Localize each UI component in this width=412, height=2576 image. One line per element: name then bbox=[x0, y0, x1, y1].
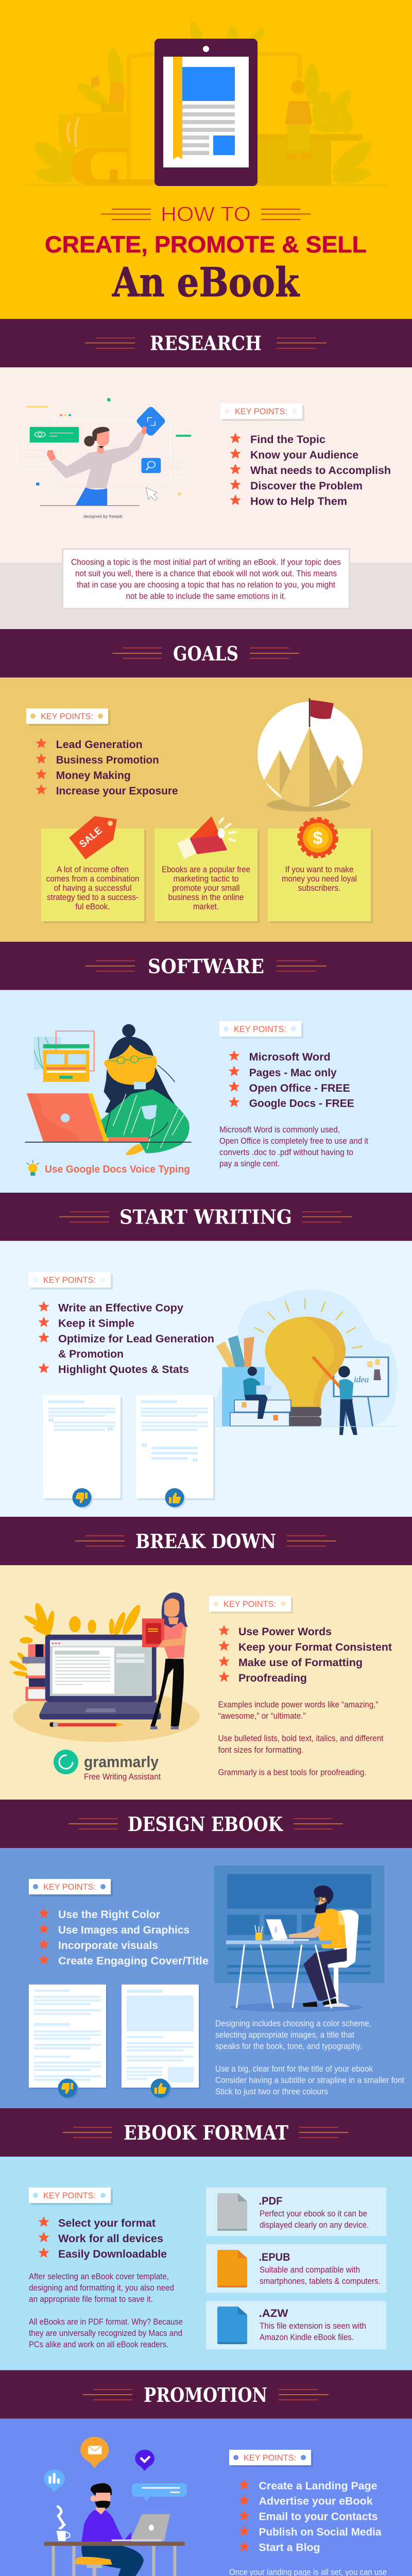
heading: goals bbox=[0, 629, 412, 677]
key points list: Discover the Problem bbox=[250, 480, 363, 492]
card: marketing: Ebooks are a popular free bbox=[162, 865, 250, 874]
key points badge bbox=[29, 1879, 113, 1896]
card: subscribers: subscribers. bbox=[298, 883, 341, 893]
logo: grammarly bbox=[54, 1750, 161, 1782]
icon: orange file bbox=[217, 2250, 247, 2287]
key points list: Start a Blog bbox=[259, 2541, 320, 2553]
illustration: man working at desk bbox=[214, 1866, 384, 2012]
key points list: Use the Right Color bbox=[58, 1909, 160, 1921]
icon: megaphone bbox=[177, 816, 235, 859]
card: good page bbox=[136, 1395, 215, 1509]
paragraph: font sizes for formatting. bbox=[218, 1745, 304, 1755]
key points list: Keep it Simple bbox=[58, 1317, 134, 1329]
key points list: Create a Landing Page bbox=[259, 2480, 377, 2492]
panel: design ebook bbox=[0, 1848, 412, 2108]
key points badge bbox=[209, 1596, 293, 1614]
key points badge: KEY POINTS: bbox=[43, 1276, 96, 1285]
heading: ebook format bbox=[0, 2108, 412, 2157]
heading: start writing: START WRITING bbox=[119, 1206, 292, 1228]
paragraph: Examples include power words like “amazing,” bbox=[218, 1700, 379, 1709]
panel: start writing bbox=[0, 1241, 412, 1517]
format card: PDF: displayed clearly on any device. bbox=[260, 2220, 369, 2230]
heading: software bbox=[0, 942, 412, 990]
key points list: Incorporate visuals bbox=[58, 1940, 158, 1952]
format card: PDF: .PDF bbox=[259, 2195, 283, 2207]
illustration: woman with laptop and book bbox=[8, 1592, 200, 1742]
key points list: Highlight Quotes & Stats bbox=[58, 1364, 189, 1376]
key points list bbox=[219, 1625, 392, 1684]
paragraph bbox=[219, 1125, 368, 1168]
icon: dollar badge: $ bbox=[313, 828, 323, 848]
paragraph: Grammarly is a best tools for proofreading. bbox=[218, 1767, 367, 1777]
key points list: Work for all devices bbox=[58, 2233, 163, 2245]
key points list: Advertise your eBook bbox=[259, 2496, 373, 2507]
paragraph: designing and formatting it, you also need bbox=[29, 2283, 174, 2293]
key points list bbox=[39, 2217, 167, 2260]
icon: thumbs up bbox=[150, 2078, 171, 2099]
format card: AZW: .AZW bbox=[259, 2308, 288, 2319]
format card: AZW bbox=[206, 2301, 386, 2349]
key points list: Easily Downloadable bbox=[58, 2248, 167, 2260]
card: income: A lot of income often bbox=[57, 865, 129, 874]
card: good layout bbox=[122, 1985, 200, 2099]
heading: break down: BREAK DOWN bbox=[135, 1530, 276, 1553]
key points badge: KEY POINTS: bbox=[43, 2191, 96, 2200]
paragraph: “awesome,” or “ultimate.” bbox=[218, 1711, 306, 1721]
key points list: Increase your Exposure bbox=[56, 785, 178, 797]
key points list: Business Promotion bbox=[56, 754, 159, 766]
key points list: Lead Generation bbox=[56, 739, 143, 751]
card: subscribers bbox=[268, 819, 373, 923]
title: An eBook bbox=[112, 259, 300, 306]
key points list: Proofreading bbox=[238, 1672, 307, 1684]
format card: EPUB: smartphones, tablets & computers. bbox=[260, 2276, 381, 2286]
illustration: woman at laptop bbox=[25, 1024, 191, 1155]
card: subscribers: money you need loyal bbox=[282, 874, 357, 884]
key points badge: KEY POINTS: bbox=[41, 712, 93, 721]
heading: goals: GOALS bbox=[173, 642, 238, 665]
key points list: Find the Topic bbox=[250, 434, 325, 446]
logo: grammarly: grammarly bbox=[84, 1753, 159, 1771]
key points list bbox=[39, 1908, 209, 1967]
key points badge bbox=[219, 1021, 303, 1039]
panel: hero bbox=[0, 0, 412, 319]
heading: design ebook: DESIGN EBOOK bbox=[128, 1812, 284, 1836]
panel: ebook format bbox=[0, 2157, 412, 2370]
key points list bbox=[36, 738, 178, 797]
icon: sale tag bbox=[69, 816, 117, 859]
key points list: What needs to Accomplish bbox=[250, 465, 391, 477]
key points badge bbox=[220, 403, 304, 421]
card: bad layout bbox=[29, 1985, 108, 2099]
credit: freepik: designed by freepik bbox=[83, 514, 123, 519]
heading: software: SOFTWARE bbox=[148, 955, 264, 978]
paragraph: Microsoft Word is commonly used, bbox=[219, 1125, 340, 1134]
key points list: Make use of Formatting bbox=[238, 1657, 363, 1669]
format card: PDF: Perfect your ebook so it can be bbox=[260, 2209, 367, 2218]
key points list: Use Power Words bbox=[238, 1626, 332, 1638]
heading: start writing bbox=[0, 1193, 412, 1241]
key points badge: KEY POINTS: bbox=[244, 2453, 296, 2463]
illustration: man at computer with chat bubbles bbox=[27, 2437, 196, 2576]
text box bbox=[63, 549, 349, 609]
paragraph: PCs alike and work on all eBook readers. bbox=[29, 2340, 168, 2349]
key points list: Select your format bbox=[58, 2217, 156, 2229]
logo: grammarly: Free Writing Assistant bbox=[84, 1772, 161, 1782]
icon: dollar badge bbox=[299, 819, 336, 856]
card: marketing: market. bbox=[193, 902, 219, 911]
key points badge: KEY POINTS: bbox=[234, 1025, 286, 1034]
format card: EPUB: .EPUB bbox=[259, 2251, 290, 2263]
paragraph bbox=[215, 2019, 404, 2096]
card: subscribers: If you want to make bbox=[285, 865, 353, 874]
paragraph: Use bulleted lists, bold text, italics, and different bbox=[218, 1733, 384, 1743]
card: marketing: marketing tactic to bbox=[173, 874, 239, 884]
icon: grey file bbox=[217, 2193, 247, 2231]
card: good page: ” bbox=[192, 1456, 198, 1470]
paragraph: converts .doc to .pdf without having to bbox=[219, 1147, 353, 1157]
key points list bbox=[39, 1301, 214, 1376]
key points badge bbox=[29, 1272, 113, 1290]
board label: idea bbox=[354, 1375, 369, 1384]
card: income: of having a successful bbox=[54, 883, 132, 893]
paragraph: After selecting an eBook cover template, bbox=[29, 2272, 169, 2281]
tip text: Use Google Docs Voice Typing bbox=[45, 1164, 190, 1175]
text box: that in case you are choosing a topic that has no relation to you, you might bbox=[77, 580, 335, 589]
format card: AZW: This file extension is seen with bbox=[260, 2321, 366, 2331]
panel: break down bbox=[0, 1565, 412, 1800]
paragraph: Designing includes choosing a color scheme, bbox=[215, 2019, 371, 2028]
key points badge bbox=[229, 2450, 313, 2467]
card: marketing bbox=[154, 816, 260, 923]
key points list: Know your Audience bbox=[250, 449, 358, 461]
card: bad page: “ bbox=[48, 1416, 54, 1429]
icon: sale tag: SALE bbox=[77, 825, 105, 850]
panel: software bbox=[0, 990, 412, 1193]
key points list: Keep your Format Consistent bbox=[238, 1641, 392, 1653]
paragraph: Open Office is completely free to use and it bbox=[219, 1136, 368, 1146]
key points list: Microsoft Word bbox=[249, 1051, 331, 1063]
key points list: Use Images and Graphics bbox=[58, 1924, 190, 1936]
paragraph: they are universally recognized by Macs and bbox=[29, 2328, 182, 2338]
panel: research bbox=[0, 367, 412, 629]
key points list: Publish on Social Media bbox=[259, 2526, 382, 2538]
heading: promotion: PROMOTION bbox=[144, 2383, 267, 2406]
illustration: light bulb with people bbox=[213, 1290, 398, 1435]
tablet illustration bbox=[154, 39, 258, 186]
heading: research: RESEARCH bbox=[150, 332, 262, 354]
icon: light bulb tip bbox=[27, 1160, 39, 1176]
card: marketing: business in the online bbox=[168, 892, 244, 902]
card: good page: “ bbox=[141, 1441, 147, 1454]
key points list: Pages - Mac only bbox=[249, 1067, 337, 1079]
text box: not be able to include the same emotions in it. bbox=[126, 591, 286, 601]
panel: goals bbox=[0, 677, 412, 942]
key points list: Optimize for Lead Generation bbox=[58, 1333, 214, 1345]
card: income: comes from a combination bbox=[46, 874, 139, 884]
key points list: How to Help Them bbox=[250, 496, 347, 507]
title: CREATE, PROMOTE & SELL bbox=[45, 231, 367, 258]
card: bad page: ” bbox=[107, 1426, 113, 1439]
icon: thumbs down bbox=[58, 2078, 78, 2099]
key points badge: KEY POINTS: bbox=[235, 407, 287, 416]
key points list: Google Docs - FREE bbox=[249, 1098, 354, 1110]
icon: thumbs down bbox=[72, 1488, 93, 1509]
paragraph: pay a single cent. bbox=[219, 1159, 280, 1168]
key points list: & Promotion bbox=[58, 1348, 124, 1360]
paragraph bbox=[218, 1700, 384, 1777]
heading: ebook format: EBOOK FORMAT bbox=[124, 2121, 288, 2144]
key points list bbox=[229, 1051, 354, 1110]
heading: design ebook bbox=[0, 1800, 412, 1848]
paragraph: Use a big, clear font for the title of your ebook bbox=[215, 2064, 373, 2074]
key points list: Money Making bbox=[56, 770, 131, 782]
paragraph: selecting appropriate images, a title that bbox=[215, 2030, 354, 2040]
key points badge bbox=[29, 2188, 113, 2205]
format card: EPUB: Suitable and compatible with bbox=[260, 2265, 360, 2275]
text box: Choosing a topic is the most initial part of writing an eBook. If your topic does bbox=[71, 557, 341, 567]
format card: AZW: Amazon Kindle eBook files. bbox=[260, 2332, 354, 2342]
key points badge bbox=[26, 708, 110, 726]
heading: break down bbox=[0, 1517, 412, 1565]
icon: thumbs up bbox=[165, 1488, 185, 1509]
title: HOW TO bbox=[161, 203, 251, 226]
paragraph: Stick to just two or three colours bbox=[215, 2087, 328, 2096]
icon: blue file bbox=[217, 2307, 247, 2344]
key points list bbox=[230, 433, 391, 507]
title bbox=[45, 203, 367, 306]
paragraph bbox=[29, 2272, 183, 2349]
card: income: strategy tied to a success- bbox=[47, 892, 139, 902]
card: income: ful eBook. bbox=[75, 902, 110, 911]
panel: promotion bbox=[0, 2418, 412, 2576]
paragraph: All eBooks are in PDF format. Why? Because bbox=[29, 2317, 183, 2327]
key points badge: KEY POINTS: bbox=[224, 1600, 276, 1609]
key points list: Email to your Contacts bbox=[259, 2511, 378, 2522]
heading: research bbox=[0, 319, 412, 367]
key points badge: KEY POINTS: bbox=[43, 1883, 96, 1892]
paragraph: speaks for the book, tone, and typography. bbox=[215, 2041, 362, 2051]
format card: EPUB bbox=[206, 2244, 386, 2293]
key points list: Write an Effective Copy bbox=[58, 1302, 183, 1314]
illustration: mountain with flag bbox=[258, 698, 363, 811]
card: bad page bbox=[43, 1395, 123, 1509]
card: marketing: promote your small bbox=[172, 883, 240, 893]
illustration: woman with interface bbox=[18, 398, 191, 506]
heading: promotion bbox=[0, 2370, 412, 2418]
card: income bbox=[41, 816, 146, 923]
text box: not suit you well, there is a chance that ebook will not work out. This means bbox=[75, 569, 337, 578]
format card: PDF bbox=[206, 2188, 386, 2236]
key points list: Open Office - FREE bbox=[249, 1082, 350, 1094]
paragraph: an appropriate file format to save it. bbox=[29, 2294, 153, 2304]
key points list: Create Engaging Cover/Title bbox=[58, 1955, 209, 1967]
key points list bbox=[239, 2480, 382, 2553]
faint background illustration bbox=[24, 21, 388, 186]
